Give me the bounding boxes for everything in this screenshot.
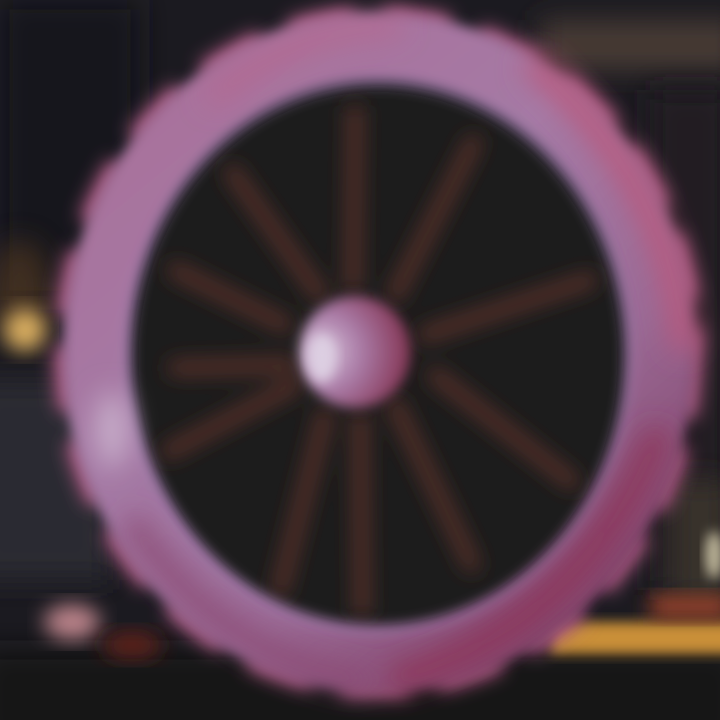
lamp glow: left bbox=[0, 240, 50, 351]
wheel rim bbox=[96, 46, 660, 658]
rim highlights and shading bbox=[96, 25, 685, 682]
wheel spokes bbox=[168, 112, 590, 610]
floor highlights: bottom bbox=[44, 531, 720, 659]
wheel hub bbox=[299, 296, 411, 408]
wheel interior bbox=[133, 86, 623, 630]
